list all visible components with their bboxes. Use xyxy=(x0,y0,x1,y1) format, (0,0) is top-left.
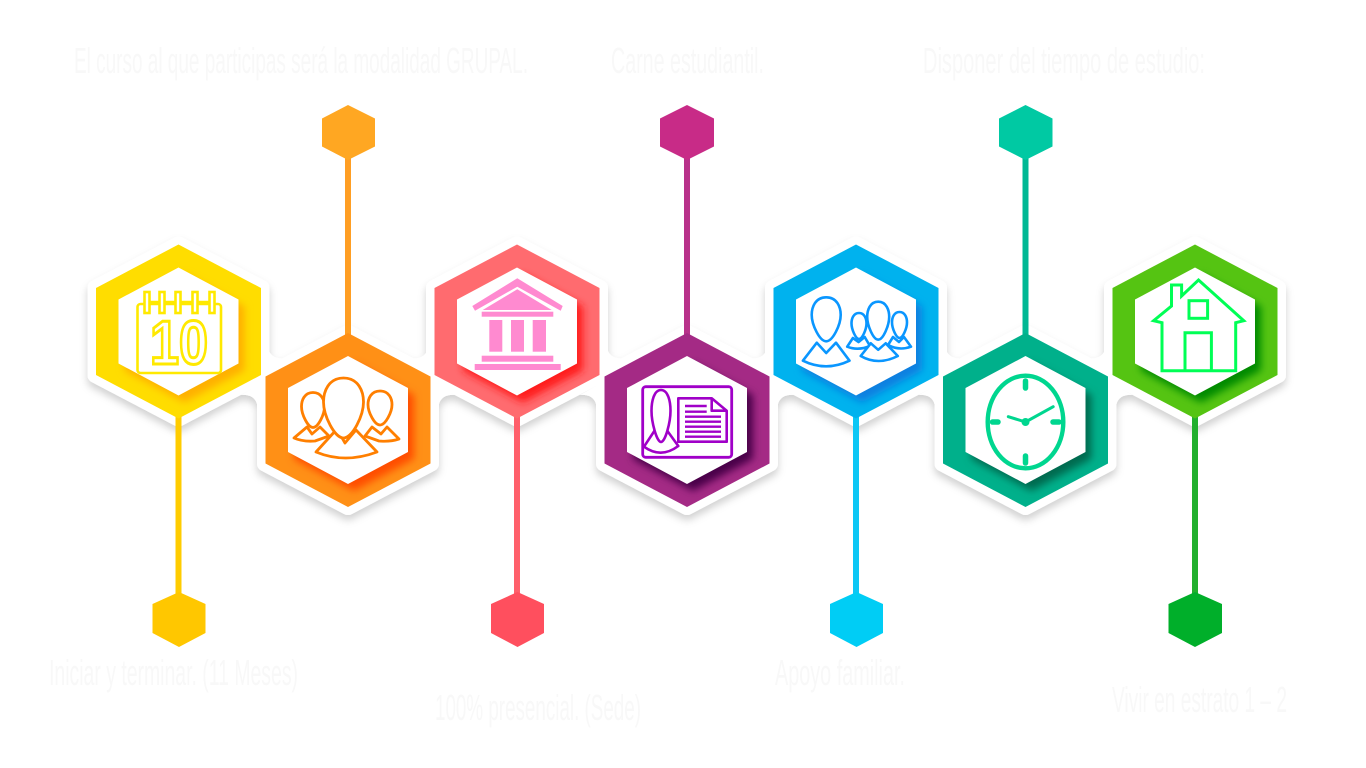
icon: clock xyxy=(988,376,1063,468)
hexagon: purple xyxy=(604,333,770,507)
hexagon: yellow xyxy=(96,244,261,418)
text: presencial: 100% presencial. (Sede) xyxy=(435,687,641,728)
connector: yellow bottom xyxy=(176,415,182,600)
connector: coral bottom xyxy=(514,415,520,600)
hexagon: teal xyxy=(943,333,1108,507)
icon: family group xyxy=(803,297,911,366)
text: carné estudiantil: Carne estudiantil. xyxy=(611,40,764,81)
icon: calendar 10: 10 xyxy=(150,309,208,378)
small hexagon: yellow xyxy=(152,592,206,647)
icon: calendar 10 xyxy=(138,292,221,378)
connector: magenta top xyxy=(684,150,690,336)
hexagon: coral xyxy=(434,244,600,418)
icon: house xyxy=(1154,280,1244,371)
text: duración: Iniciar y terminar. (11 Meses) xyxy=(49,652,298,693)
connector: green bottom xyxy=(1192,415,1198,600)
connector: teal top xyxy=(1022,150,1028,336)
small hexagon: orange xyxy=(322,105,375,160)
hexagon: orange xyxy=(266,333,430,507)
text: modalidad grupal: El curso al que participas será la modalidad GRUPAL. xyxy=(74,40,528,81)
small hexagon: teal xyxy=(999,105,1052,160)
white hexagon backing band xyxy=(96,244,1278,507)
icon: student ID card xyxy=(643,387,732,457)
small hexagon: magenta xyxy=(660,105,714,160)
hexagon: green xyxy=(1112,244,1278,418)
icon: group of three people xyxy=(294,378,399,458)
small hexagon: green xyxy=(1168,592,1222,647)
icon: institution building xyxy=(472,278,563,370)
connector: blue bottom xyxy=(853,415,859,600)
small hexagon: coral xyxy=(491,592,544,647)
hexagon: blue xyxy=(774,244,938,418)
connector: orange top xyxy=(345,150,351,336)
text: apoyo familiar: Apoyo familiar. xyxy=(775,652,905,693)
small hexagon: blue xyxy=(830,592,883,647)
